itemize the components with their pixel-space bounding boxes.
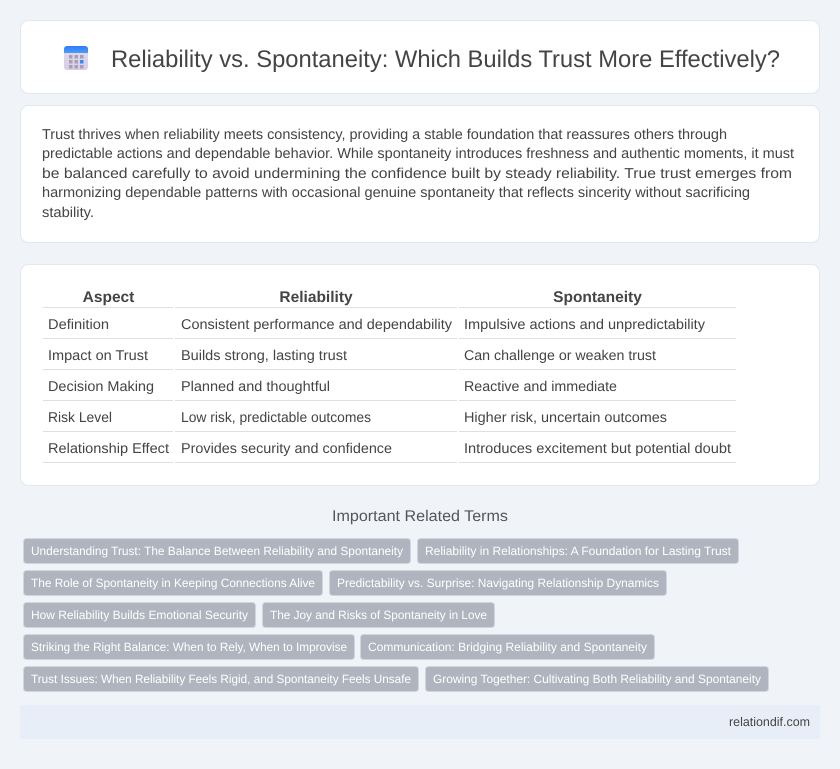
related term tags: Predictability vs. Surprise: Navigating Relationship Dynamics <box>337 576 659 590</box>
row: risk level: Higher risk, uncertain outcomes <box>464 410 667 426</box>
panel: header <box>20 20 820 94</box>
row: impact on trust: Impact on Trust <box>48 348 148 364</box>
row: definition: Impulsive actions and unpredictability <box>464 317 706 333</box>
related term tags: Reliability in Relationships: A Foundation for Lasting Trust <box>425 544 732 558</box>
heading: related terms: Important Related Terms <box>332 508 508 525</box>
row: risk level <box>48 410 667 426</box>
row: decision making: Planned and thoughtful <box>181 379 330 395</box>
icon: calendar <box>64 46 88 70</box>
intro paragraph: stability. <box>42 205 94 221</box>
row: impact on trust: Builds strong, lasting trust <box>181 348 347 364</box>
row: decision making <box>48 379 617 395</box>
row: impact on trust <box>48 348 656 364</box>
row: risk level: Risk Level <box>48 410 112 426</box>
title: Reliability vs. Spontaneity: Which Builds Trust More Effectively? <box>111 46 780 73</box>
row: relationship effect: Introduces excitement but potential doubt <box>464 441 731 457</box>
footer <box>20 705 820 739</box>
table header <box>83 289 642 306</box>
row: risk level: Low risk, predictable outcomes <box>181 410 371 426</box>
row: impact on trust: Can challenge or weaken trust <box>464 348 656 364</box>
row: decision making: Decision Making <box>48 379 154 395</box>
related term tags: How Reliability Builds Emotional Security <box>31 608 248 622</box>
row: definition: Consistent performance and dependability <box>181 317 453 333</box>
intro paragraph: harmonizing dependable patterns with occasional genuine spontaneity that reflects sincerity without sacrificing <box>42 185 750 201</box>
row: decision making: Reactive and immediate <box>464 379 617 395</box>
related term tags: The Role of Spontaneity in Keeping Connections Alive <box>31 576 315 590</box>
intro paragraph: be balanced carefully to avoid undermining the confidence built by steady reliability. True trust emerges from <box>42 166 792 182</box>
related term tags: Trust Issues: When Reliability Feels Rigid, and Spontaneity Feels Unsafe <box>31 672 411 686</box>
panel: intro <box>20 106 820 242</box>
related term tags: Striking the Right Balance: When to Rely, When to Improvise <box>31 640 347 654</box>
panel: comparison table <box>20 264 820 486</box>
row: relationship effect: Relationship Effect <box>48 441 169 457</box>
row: definition <box>48 317 706 333</box>
related term tags: Growing Together: Cultivating Both Reliability and Spontaneity <box>433 672 761 686</box>
table header: Aspect <box>83 289 134 306</box>
footer: relationdif.com <box>729 715 810 729</box>
row: relationship effect: Provides security and confidence <box>181 441 392 457</box>
table header: Spontaneity <box>553 289 642 306</box>
row: definition: Definition <box>48 317 109 333</box>
row: relationship effect <box>48 441 731 457</box>
related term tags <box>24 538 768 692</box>
related term tags: Communication: Bridging Reliability and Spontaneity <box>368 640 647 654</box>
table header: Reliability <box>279 289 353 306</box>
intro paragraph: predictable actions and dependable behavior. While spontaneity introduces freshness and authentic moments, it must <box>42 146 794 162</box>
related term tags: The Joy and Risks of Spontaneity in Love <box>270 608 487 622</box>
related term tags: Understanding Trust: The Balance Between Reliability and Spontaneity <box>31 544 403 558</box>
intro paragraph: Trust thrives when reliability meets consistency, providing a stable foundation that reassures others through <box>42 127 727 143</box>
